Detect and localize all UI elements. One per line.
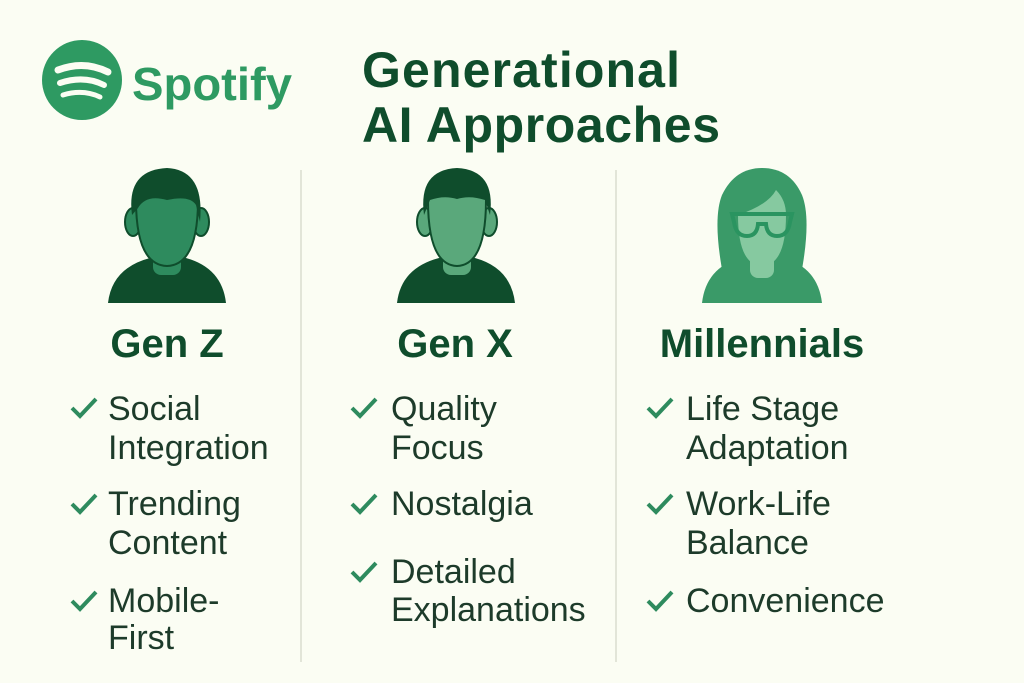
list: millennial traits [648,390,884,620]
heading: Gen Z: Gen Z [110,322,224,366]
title: AI Approaches [362,97,720,153]
logo wordmark: Spotify [132,58,292,110]
panel: Gen Z [72,168,269,657]
list: millennial traits: Life Stage [686,390,839,428]
logo: spotify [42,40,292,120]
list: gen z traits: Mobile- [108,582,219,620]
list: gen z traits: Trending [108,485,241,523]
list: gen z traits: Content [108,524,228,562]
panel: Gen X [352,168,586,629]
list: gen x traits: Detailed [391,553,516,591]
list: millennial traits: Adaptation [686,429,849,467]
list: gen x traits: Nostalgia [391,485,533,523]
icon: spotify circle [42,40,122,120]
list: gen z traits: Integration [108,429,269,467]
icon: millennial avatar [702,168,822,303]
list: gen z traits: First [108,619,175,657]
list: gen x traits: Focus [391,429,484,467]
title: Generational [362,42,680,98]
list: millennial traits: Balance [686,524,809,562]
list: millennial traits: Work-Life [686,485,831,523]
list: gen z traits [72,390,269,657]
list: gen x traits: Quality [391,390,497,428]
title [362,42,720,153]
heading: Millennials: Millennials [660,322,864,366]
list: gen x traits [352,390,586,629]
list: gen z traits: Social [108,390,201,428]
list: gen x traits: Explanations [391,591,586,629]
heading: Gen X: Gen X [397,322,513,366]
panel: Millennials [648,168,884,620]
icon: gen x avatar [397,168,515,303]
icon: gen z avatar [108,168,226,303]
list: millennial traits: Convenience [686,582,884,620]
